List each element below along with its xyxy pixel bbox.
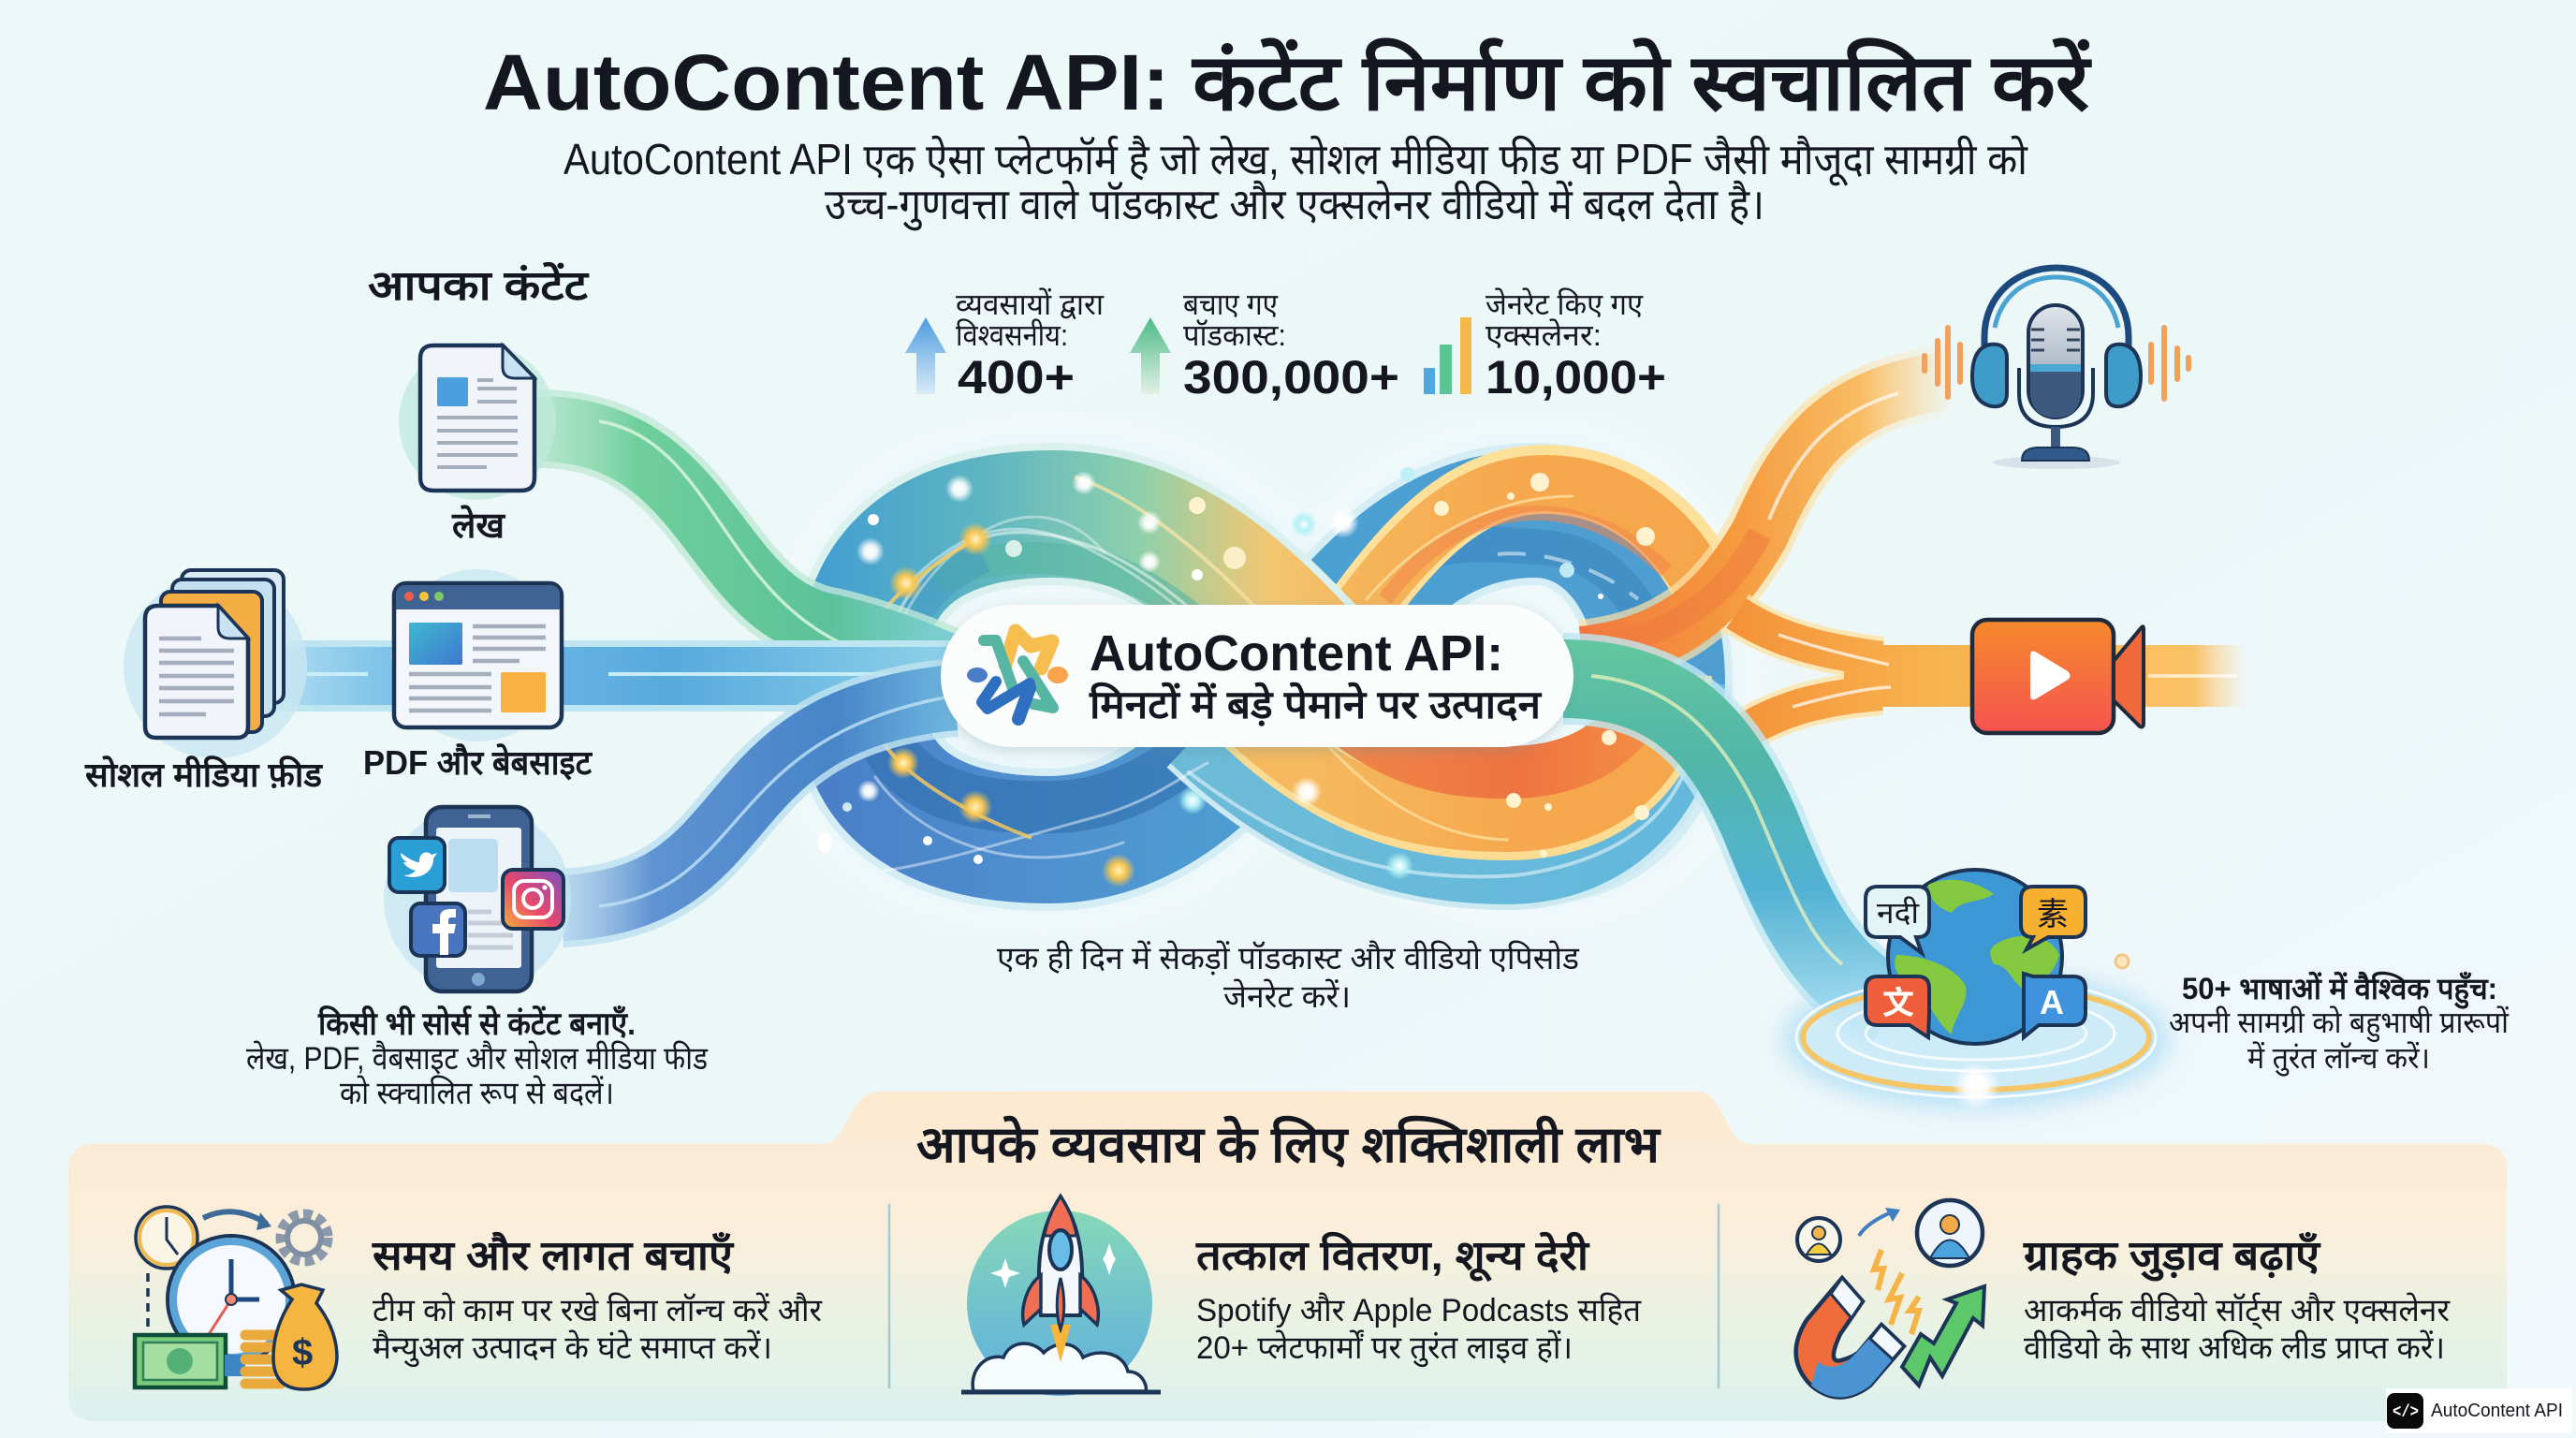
- ribbon: bottom right colours: [1189, 674, 1699, 878]
- text block: global reach: अपनी सामग्री को बहुभाषी प्रारूपों: [2169, 1005, 2510, 1043]
- center pill: मिनटों में बड़े पेमाने पर उत्पादन: [1089, 682, 1543, 726]
- stat: podcasts: 300,000+: [1183, 351, 1399, 404]
- stat: explainers: जेनरेट किए गए: [1486, 287, 1644, 321]
- icon: phone with social apps: [384, 805, 571, 992]
- icon: globe with language bubbles: A: [2040, 983, 2064, 1021]
- text block: any source: [246, 1005, 709, 1111]
- stat: explainers: [1424, 287, 1666, 404]
- title: AutoContent API: कंटेंट निर्माण को स्वचालित करें: [483, 37, 2092, 126]
- benefit: customer engagement: ग्राहक जुड़ाव बढ़ाएँ: [2023, 1231, 2321, 1282]
- watermark: [2386, 1388, 2572, 1433]
- caption: hundreds of episodes: जेनरेट करें।: [1223, 978, 1351, 1015]
- benefit: customer engagement: आकर्मक वीडियो सॉर्ट्स और एक्सलेनर: [2024, 1292, 2451, 1329]
- stat: businesses: व्यवसायों द्वारा: [956, 287, 1105, 321]
- icon: green arrow: [1130, 317, 1171, 394]
- icon: globe with language bubbles: नदी: [1877, 896, 1920, 930]
- text block: global reach: [2169, 971, 2510, 1077]
- text block: global reach: में तुरंत लॉन्च करें।: [2247, 1041, 2430, 1077]
- icon: bar chart: [1424, 317, 1471, 394]
- label: article: लेख: [451, 505, 506, 546]
- icon: article document: [399, 343, 556, 500]
- stat: businesses: विश्वसनीय:: [956, 318, 1068, 352]
- text block: any source: लेख, PDF, वैबसाइट और सोशल मीडिया फीड: [246, 1040, 709, 1077]
- icon: video camera: [1972, 620, 2144, 733]
- benefit: time and cost: [135, 1207, 823, 1389]
- stat: businesses: 400+: [958, 351, 1075, 404]
- benefit: time and cost: मैन्युअल उत्पादन के घंटे समाप्त करें।: [373, 1329, 772, 1368]
- icon: web browser: [391, 569, 564, 741]
- center pill: [941, 605, 1573, 747]
- center pill: AutoContent API:: [1090, 625, 1503, 682]
- label: social media feed: सोशल मीडिया फ़ीड: [84, 756, 324, 794]
- label: pdf and website: PDF और बेबसाइट: [363, 743, 593, 782]
- icon: clock and money: [135, 1207, 337, 1389]
- input ribbons: [234, 421, 955, 908]
- watermark: AutoContent API: [2431, 1401, 2563, 1421]
- light strands: [875, 477, 1694, 876]
- icon: logo: [967, 631, 1068, 719]
- ribbon: bottom left to top right: [861, 479, 1713, 840]
- stat: explainers: 10,000+: [1486, 351, 1666, 404]
- yellow strand: [876, 539, 1032, 838]
- benefit: instant delivery: Spotify और Apple Podcasts सहित: [1196, 1292, 1642, 1328]
- ribbon: top left to bottom right: [861, 514, 1334, 688]
- stat: podcasts: [1130, 287, 1399, 404]
- text block: any source: को स्क्चालित रूप से बदलें।: [340, 1075, 614, 1111]
- output ribbon: to podcast: [1582, 379, 1956, 655]
- icon: rocket: [961, 1196, 1161, 1396]
- icon: globe with language bubbles: 素: [2037, 888, 2069, 934]
- icon: globe with language bubbles: [1784, 870, 2168, 1110]
- panel: business benefits: [68, 1092, 2507, 1421]
- stat: explainers: एक्सलेनर:: [1486, 318, 1602, 352]
- heading: your content: आपका कंटेंट: [368, 261, 590, 309]
- output ribbon: to globe: [1563, 676, 1891, 1006]
- benefit: customer engagement: [1796, 1200, 2451, 1397]
- stat: podcasts: बचाए गए: [1183, 287, 1279, 321]
- subtitle: AutoContent API एक ऐसा प्लेटफॉर्म है जो लेख, सोशल मीडिया फीड या PDF जैसी मौजूदा सामग्री को: [564, 135, 2028, 186]
- panel heading: आपके व्यवसाय के लिए शक्तिशाली लाभ: [916, 1115, 1661, 1173]
- loop halo: [861, 510, 1666, 838]
- benefit: customer engagement: वीडियो के साथ अधिक लीड प्राप्त करें।: [2024, 1329, 2445, 1366]
- benefit: instant delivery: तत्काल वितरण, शून्य देरी: [1195, 1231, 1590, 1283]
- benefit: time and cost: समय और लागत बचाएँ: [372, 1231, 735, 1279]
- benefit: instant delivery: 20+ प्लेटफार्मों पर तुरंत लाइव हों।: [1196, 1329, 1573, 1368]
- icon: magnet and growth: [1796, 1200, 1984, 1397]
- ribbon: social media: [562, 697, 955, 908]
- subtitle: उच्च-गुणवत्ता वाले पॉडकास्ट और एक्सलेनर वीडियो में बदल देता है।: [825, 180, 1764, 231]
- ribbon: social feed and web: [234, 674, 955, 676]
- infinity loop flow: [818, 467, 1713, 888]
- icon: blue arrow: [905, 317, 946, 394]
- caption: hundreds of episodes: [997, 940, 1580, 1015]
- icon: podcast microphone and headphones: [1925, 268, 2188, 469]
- output ribbons: to video: [1732, 613, 2247, 740]
- text block: global reach: 50+ भाषाओं में वैश्विक पहुँच:: [2182, 971, 2497, 1009]
- icon: globe with language bubbles: 文: [1882, 977, 1914, 1023]
- stat: podcasts: पॉडकास्ट:: [1183, 318, 1286, 352]
- stat: businesses: [905, 287, 1105, 404]
- watermark: </>: [2393, 1403, 2419, 1422]
- ribbon: article: [538, 421, 955, 669]
- subtitle: [564, 135, 2028, 231]
- sparkle dots: [818, 467, 1655, 888]
- icon: clock and money: $: [292, 1332, 313, 1373]
- text block: any source: किसी भी सोर्स से कंटेंट बनाएँ.: [317, 1005, 636, 1042]
- icon: stacked documents: [124, 570, 307, 758]
- benefit: time and cost: टीम को काम पर रखे बिना लॉन्च करें और: [373, 1292, 823, 1328]
- caption: hundreds of episodes: एक ही दिन में सेकड़ों पॉडकास्ट और वीडियो एपिसोड: [997, 940, 1580, 976]
- benefit: instant delivery: [961, 1196, 1642, 1396]
